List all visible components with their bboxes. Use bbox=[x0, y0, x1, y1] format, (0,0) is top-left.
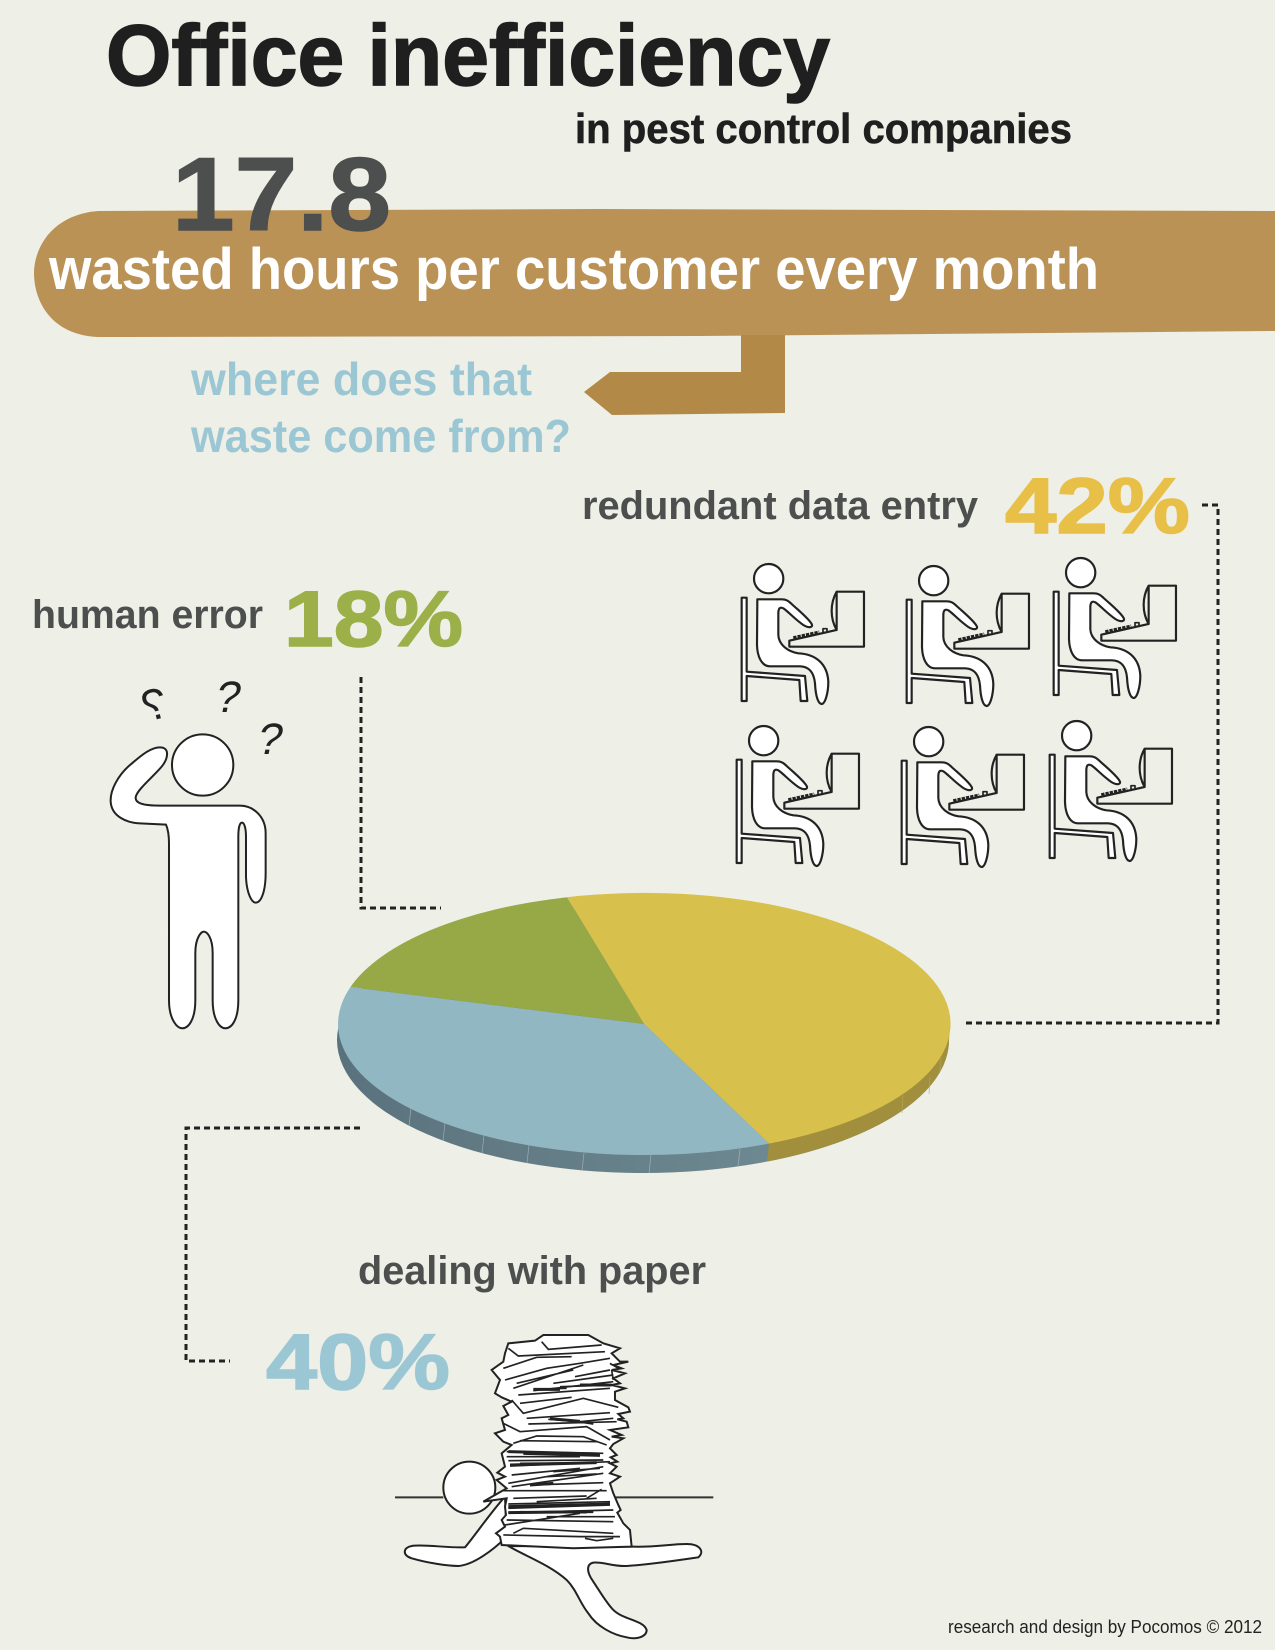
brown banner bbox=[34, 209, 1275, 337]
question text: where does that bbox=[190, 353, 532, 405]
18 percent: 18% bbox=[284, 574, 463, 663]
42 percent: 42% bbox=[1005, 461, 1190, 550]
40 percent: 40% bbox=[266, 1317, 450, 1406]
pie slice: yellow 42% bbox=[567, 893, 951, 1144]
dashed leader: redundant data entry bbox=[966, 505, 1218, 1023]
icon: six office workers at computers bbox=[737, 558, 1176, 867]
pie slice: blue 40% bbox=[338, 987, 769, 1155]
3D pie chart bbox=[337, 893, 951, 1173]
dashed leader: human error bbox=[361, 677, 441, 908]
pie slice: green 18% bbox=[350, 897, 644, 1024]
big number 17.8: 17.8 bbox=[172, 137, 391, 253]
arrow from banner to question bbox=[584, 335, 785, 415]
icon: confused person with question marks: ? bbox=[137, 678, 172, 732]
dashed leader: dealing with paper bbox=[186, 1128, 360, 1361]
label: dealing with paper: dealing with paper bbox=[358, 1249, 706, 1293]
label: redundant data entry: redundant data entry bbox=[582, 484, 979, 528]
banner text: wasted hours per customer every month bbox=[48, 237, 1099, 302]
title: Office inefficiency bbox=[106, 8, 830, 104]
icon: confused person with question marks bbox=[111, 673, 288, 1028]
question text bbox=[190, 353, 571, 462]
subtitle: in pest control companies bbox=[575, 105, 1072, 152]
credit line: research and design by Pocomos © 2012 bbox=[948, 1617, 1262, 1637]
pie side: yellow bbox=[767, 1024, 950, 1162]
label: human error: human error bbox=[32, 593, 263, 637]
icon: confused person with question marks: ? bbox=[253, 715, 288, 764]
pie side: blue bbox=[337, 907, 949, 1173]
question text: waste come from? bbox=[190, 410, 571, 462]
icon: person behind a tall stack of paper bbox=[395, 1335, 713, 1638]
icon: confused person with question marks: ? bbox=[211, 673, 246, 722]
